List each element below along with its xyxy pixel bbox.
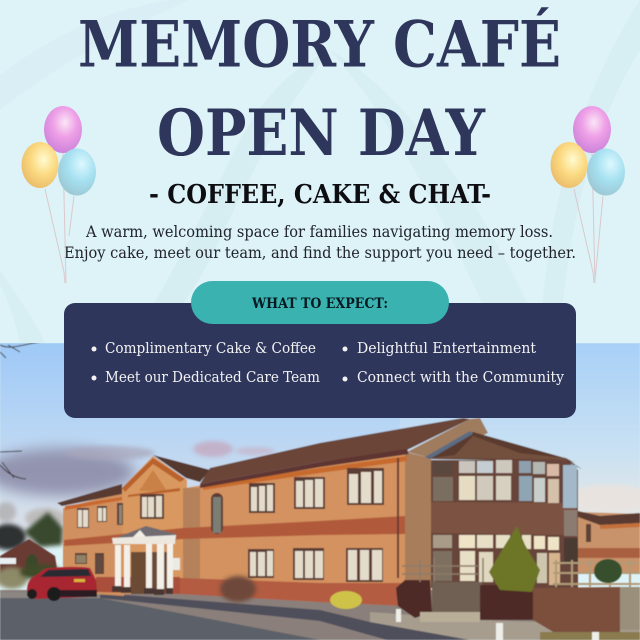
list of features xyxy=(92,339,564,386)
subtitle: - COFFEE, CAKE & CHAT- xyxy=(149,180,491,210)
list of features: Connect with the Community xyxy=(357,368,564,386)
main building xyxy=(57,418,640,606)
far right wing xyxy=(578,512,640,572)
intro text: A warm, welcoming space for families navigating memory loss. xyxy=(85,222,553,241)
background panel xyxy=(0,0,640,344)
building photograph xyxy=(0,342,640,640)
sky xyxy=(0,343,640,543)
balloons right xyxy=(550,106,625,283)
bay window xyxy=(431,460,578,588)
list of features: Meet our Dedicated Care Team xyxy=(105,368,320,386)
intro text: Enjoy cake, meet our team, and find the support you need – together. xyxy=(64,243,576,262)
upper and lower windows xyxy=(75,468,384,582)
panel: what to expect xyxy=(64,281,576,418)
brick bands xyxy=(64,516,405,546)
gabled section wall xyxy=(122,456,187,594)
title xyxy=(78,8,561,171)
shrubs, hedges and fence xyxy=(220,526,640,640)
background trees and house xyxy=(0,502,65,589)
right wing wall xyxy=(186,454,406,584)
pill heading xyxy=(191,281,449,324)
title: MEMORY CAFÉ xyxy=(78,8,561,82)
list of features: Delightful Entertainment xyxy=(357,339,536,357)
intro text xyxy=(64,222,576,262)
pill heading: WHAT TO EXPECT: xyxy=(251,296,388,312)
bare branches xyxy=(0,342,40,479)
entrance portico xyxy=(112,526,180,595)
left wing wall xyxy=(63,492,124,596)
list of features: Complimentary Cake & Coffee xyxy=(105,339,316,357)
red car xyxy=(27,567,97,601)
gable lattice xyxy=(139,470,167,491)
trim strips xyxy=(65,497,122,510)
roofs xyxy=(57,484,122,506)
title: OPEN DAY xyxy=(157,96,486,171)
drainpipe xyxy=(397,458,399,578)
ground and road xyxy=(0,590,640,640)
balloons left xyxy=(22,106,96,283)
